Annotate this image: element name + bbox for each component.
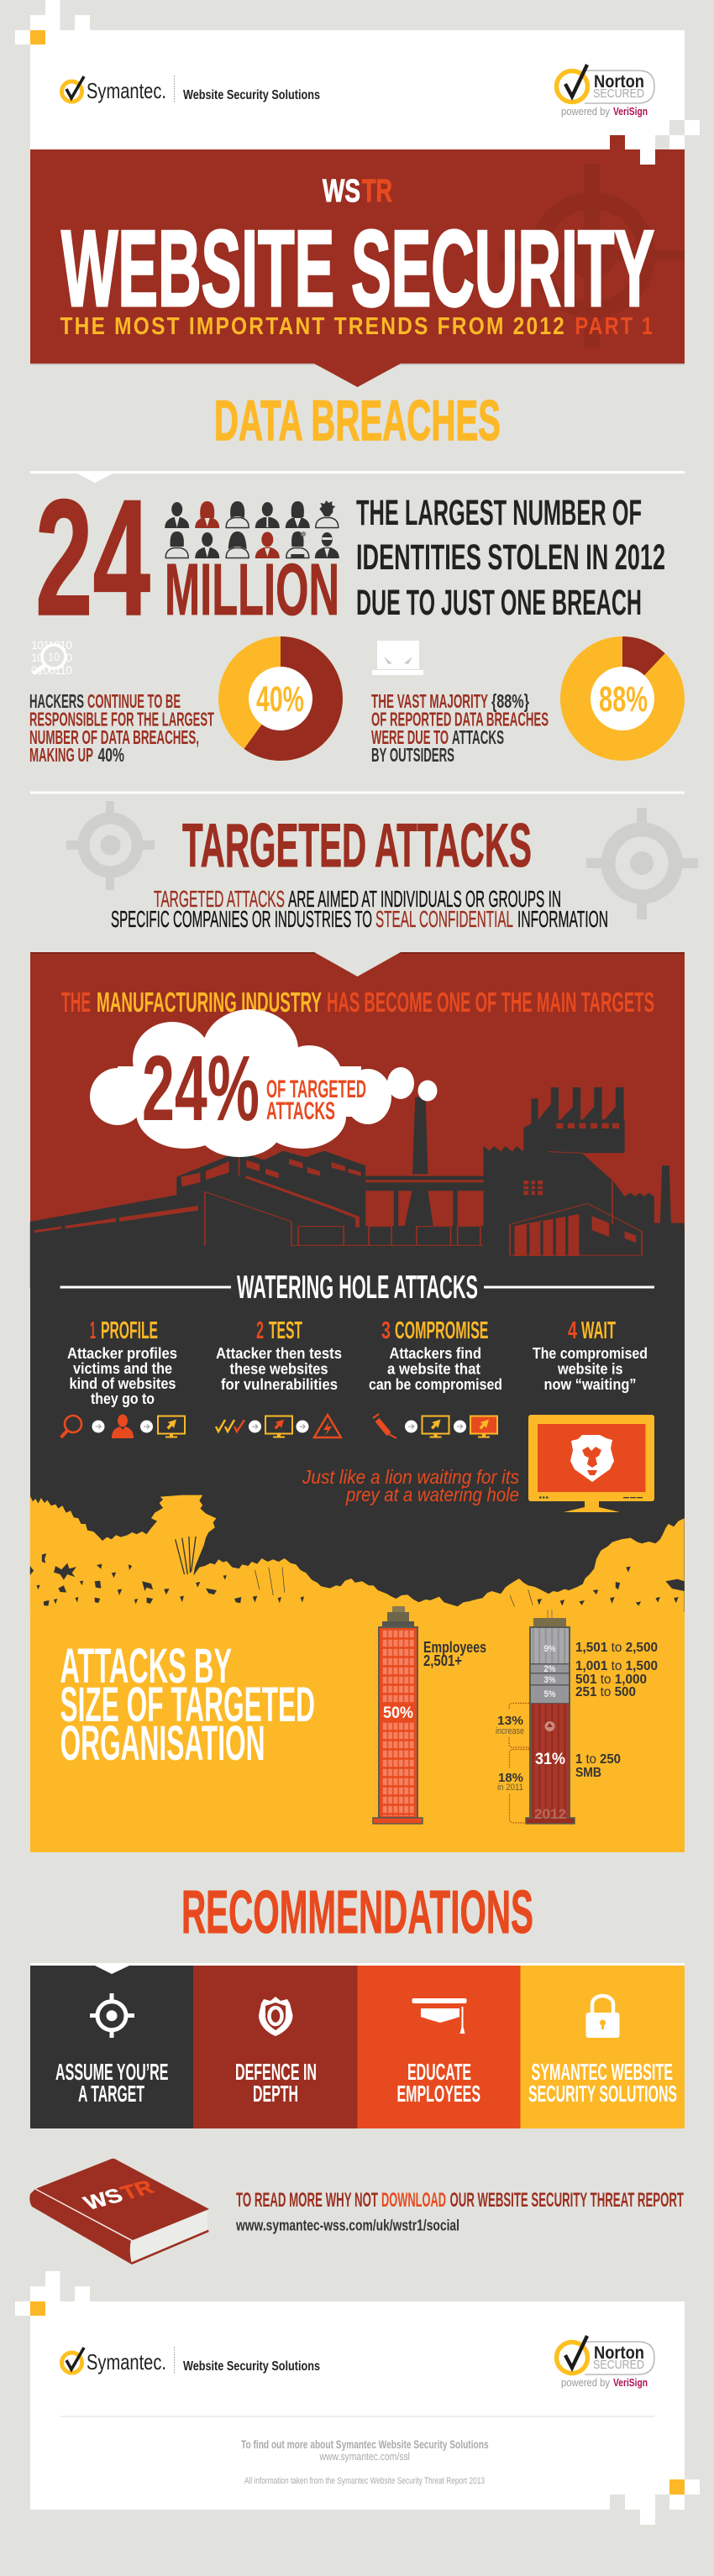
step 1 profile (60, 1317, 185, 1438)
Norton secured badge: SECURED (593, 86, 644, 101)
watering hole heading (60, 1270, 654, 1306)
word million: MILLION (165, 549, 339, 631)
text: OF REPORTED DATA BREACHES (371, 709, 549, 730)
heading: attacks by size: SIZE OF TARGETED (60, 1678, 315, 1732)
cloud text 24 percent: 24% (142, 1037, 260, 1140)
lion caption: prey at a watering hole (345, 1484, 519, 1505)
donut chart 40%: 40% (256, 679, 304, 720)
icon: target left (66, 801, 155, 890)
tower chart: 50 percent (373, 1606, 423, 1824)
intro text: STEAL CONFIDENTIAL (375, 906, 513, 932)
row 2 (165, 531, 339, 558)
icon: binary magnifier: 10 (48, 650, 60, 663)
stat: 24 million (35, 465, 665, 650)
number 24: 24 (35, 465, 150, 650)
icon: target (90, 1993, 134, 2038)
icon: target right (586, 808, 698, 919)
call to action: www.symantec-wss.com/uk/wstr1/social (235, 2217, 459, 2233)
step 2 test: these websites (230, 1360, 328, 1377)
book cover text: WS (80, 2186, 127, 2214)
bracket: increase and 2011 (494, 1703, 529, 1823)
labels: size bands: SMB (575, 1766, 601, 1780)
bracket: increase and 2011: in 2011 (497, 1783, 523, 1793)
footer text: All information taken from the Symantec Website Security Threat Report 2013 (244, 2476, 485, 2486)
step 1 profile: PROFILE (101, 1317, 158, 1344)
bracket: increase and 2011: increase (496, 1726, 524, 1736)
step 2 test: for vulnerabilities (221, 1376, 338, 1393)
row 1 (165, 500, 339, 528)
step 4 wait (528, 1317, 654, 1512)
footer text (241, 2437, 489, 2486)
lion caption (302, 1466, 519, 1505)
tower chart: 50 percent: 50% (383, 1704, 413, 1722)
step 2 test (216, 1317, 342, 1437)
tower chart: 2012 breakdown: 5% (544, 1689, 556, 1699)
intro text (111, 886, 608, 932)
WSTR mark: WS (323, 174, 360, 209)
foliage silhouette (30, 1495, 685, 1615)
label: employees (423, 1639, 486, 1669)
text: RESPONSIBLE FOR THE LARGEST (29, 709, 214, 730)
step 3 compromise: can be compromised (369, 1376, 502, 1393)
intro text: SPECIFIC COMPANIES OR INDUSTRIES TO (111, 906, 372, 932)
tower chart: 2012 breakdown (526, 1610, 575, 1824)
tower chart: 2012 breakdown: 31% (535, 1751, 565, 1768)
text (371, 690, 549, 766)
card: assume target (30, 1966, 193, 2128)
icon: binary magnifier: 0100110 (31, 663, 72, 677)
hero panel (30, 120, 700, 387)
step 1 profile: 1 (90, 1317, 96, 1344)
labels: size bands: 501 to 1,000 (575, 1673, 647, 1687)
WSTR mark: TR (362, 174, 392, 209)
labels: size bands: 1,001 to 1,500 (575, 1659, 658, 1673)
hacker stat (29, 636, 343, 766)
heading: attacks by size: ATTACKS BY (60, 1639, 232, 1694)
step 3 compromise: 3 (381, 1317, 391, 1344)
lion caption: Just like a lion waiting for its (302, 1466, 519, 1488)
icon: book (29, 2159, 209, 2264)
text: CONTINUE TO BE (87, 690, 181, 712)
step 4 wait: website is (557, 1360, 623, 1377)
outsiders stat (371, 636, 685, 766)
call to action: DOWNLOAD (381, 2189, 446, 2212)
tower chart: 2012 breakdown: 2012 (534, 1806, 566, 1822)
labels: size bands: 251 to 500 (575, 1685, 636, 1699)
subtitle: PART 1 (575, 313, 654, 340)
Symantec logo footer: Website Security Solutions (183, 2359, 320, 2374)
bracket: increase and 2011: 13% (497, 1714, 523, 1728)
text (29, 690, 214, 766)
Norton badge footer: Norton (594, 2343, 644, 2363)
factory silhouette (30, 1087, 685, 1287)
icons: profile sequence (60, 1414, 185, 1438)
header panel (15, 0, 685, 149)
icon: padlock (586, 1996, 620, 2038)
card: assume target: A TARGET (78, 2081, 144, 2107)
manufacturing headline (61, 987, 654, 1018)
step 3 compromise: Attackers find (390, 1345, 481, 1362)
step 4 wait: 4 (568, 1317, 577, 1344)
pixel decoration footer right (610, 2479, 700, 2525)
text: HACKERS (29, 690, 84, 712)
bracket: increase and 2011: 18% (498, 1771, 523, 1785)
icon: masked hat (372, 641, 423, 675)
card: educate employees: EDUCATE (407, 2059, 471, 2085)
card: educate employees (358, 1966, 521, 2128)
card: defence in depth (193, 1966, 358, 2128)
watering hole heading: WATERING HOLE ATTACKS (237, 1270, 478, 1306)
card: symantec solutions (521, 1966, 685, 2128)
Symantec logo footer: Symantec. (87, 2349, 166, 2374)
heading: attacks by size: ORGANISATION (60, 1716, 265, 1771)
panel: attacks by size (30, 1495, 685, 1852)
text: ATTACKS (452, 726, 504, 748)
people icons (165, 500, 339, 558)
cloud (90, 1009, 437, 1157)
Norton secured badge: powered by (561, 105, 610, 118)
cloud text of targeted attacks: OF TARGETED (266, 1076, 366, 1103)
panel: manufacturing and watering hole (30, 952, 685, 1624)
divider with notch (30, 471, 685, 483)
card: educate employees: EMPLOYEES (396, 2081, 480, 2107)
footer text: www.symantec.com/ssl (319, 2450, 410, 2463)
panel: recommendations (30, 1963, 685, 2128)
text: THE VAST MAJORITY (371, 690, 488, 712)
tower chart: 2012 breakdown: 9% (544, 1644, 556, 1654)
intro text: TARGETED ATTACKS (154, 886, 285, 912)
Symantec logo: Symantec. (87, 78, 166, 103)
book cover text (80, 2177, 158, 2214)
Norton secured badge (556, 65, 654, 118)
donut chart 88% (560, 636, 685, 761)
heading: attacks by size (60, 1639, 315, 1771)
Symantec logo: Website Security Solutions (183, 88, 320, 102)
step 3 compromise: a website that (387, 1360, 480, 1377)
Symantec logo (62, 76, 320, 103)
step 4 wait: The compromised (533, 1345, 648, 1362)
cloud text of targeted attacks (266, 1076, 366, 1125)
tower chart: 2012 breakdown: 3% (544, 1675, 556, 1685)
divider (30, 791, 685, 794)
heading: data breaches: DATA BREACHES (214, 389, 501, 453)
statement text (356, 493, 665, 623)
icon: graduation cap (412, 1998, 467, 2034)
intro text: INFORMATION (517, 906, 608, 932)
call to action (235, 2189, 684, 2233)
text: 40% (97, 744, 124, 766)
step 1 profile: they go to (91, 1390, 155, 1407)
donut chart 88%: 88% (599, 679, 648, 720)
text: WERE DUE TO (371, 726, 449, 748)
footer text: To find out more about Symantec Website Security Solutions (241, 2437, 489, 2451)
text: MAKING UP (29, 744, 93, 766)
book cover text: TR (118, 2177, 158, 2204)
icons: test sequence (216, 1415, 341, 1437)
Norton secured badge: VeriSign (613, 105, 648, 118)
text: NUMBER OF DATA BREACHES, (29, 726, 199, 748)
manufacturing headline: MANUFACTURING INDUSTRY (97, 987, 322, 1018)
card: defence in depth: DEFENCE IN (235, 2059, 317, 2085)
icon: binary magnifier: 1011010 (31, 651, 72, 664)
faint target icon (500, 164, 685, 348)
step 1 profile: kind of websites (69, 1375, 176, 1392)
step 4 wait: now “waiting” (544, 1376, 637, 1393)
icon: binary magnifier: 1011010 (31, 638, 72, 652)
cloud text of targeted attacks: ATTACKS (266, 1097, 335, 1125)
Norton secured badge: Norton (594, 72, 644, 92)
pixel decoration top left (15, 0, 90, 45)
labels: size bands: 1 to 250 (575, 1752, 621, 1767)
pixel decoration footer left (15, 2271, 90, 2316)
step 1 profile: victims and the (73, 1360, 172, 1377)
step 3 compromise: COMPROMISE (395, 1317, 489, 1344)
Norton badge footer: powered by (561, 2376, 610, 2389)
subtitle: THE MOST IMPORTANT TRENDS FROM 2012 (60, 313, 566, 340)
label: employees: 2,501+ (423, 1652, 462, 1669)
labels: size bands (575, 1641, 658, 1780)
Norton badge footer: SECURED (593, 2358, 644, 2372)
card: assume target: ASSUME YOU’RE (55, 2059, 168, 2085)
labels: size bands: 1,501 to 2,500 (575, 1641, 658, 1655)
call to action: TO READ MORE WHY NOT (236, 2189, 378, 2212)
card: defence in depth: DEPTH (253, 2081, 298, 2107)
label: employees: Employees (423, 1639, 486, 1656)
donut chart 40% (218, 636, 343, 761)
Norton badge footer: VeriSign (613, 2376, 648, 2389)
icon: monitor with lion (528, 1415, 654, 1512)
step 1 profile: Attacker profiles (67, 1345, 177, 1362)
step 3 compromise (369, 1317, 502, 1438)
text: {88%} (491, 690, 529, 712)
pixel decoration hero right (610, 120, 700, 165)
icon: shield (259, 1997, 292, 2036)
step 2 test: Attacker then tests (216, 1345, 342, 1362)
icons: compromise sequence (373, 1414, 497, 1438)
Norton badge footer (556, 2336, 654, 2389)
Symantec logo footer (62, 2347, 320, 2374)
text: BY OUTSIDERS (371, 744, 454, 766)
footer panel (15, 2271, 700, 2525)
icon: binary magnifier (31, 638, 72, 677)
step 4 wait: WAIT (581, 1317, 616, 1344)
step 2 test: 2 (256, 1317, 264, 1344)
manufacturing headline: THE (61, 987, 91, 1018)
step 2 test: TEST (269, 1317, 302, 1344)
tower chart: 2012 breakdown: 2% (544, 1664, 556, 1674)
